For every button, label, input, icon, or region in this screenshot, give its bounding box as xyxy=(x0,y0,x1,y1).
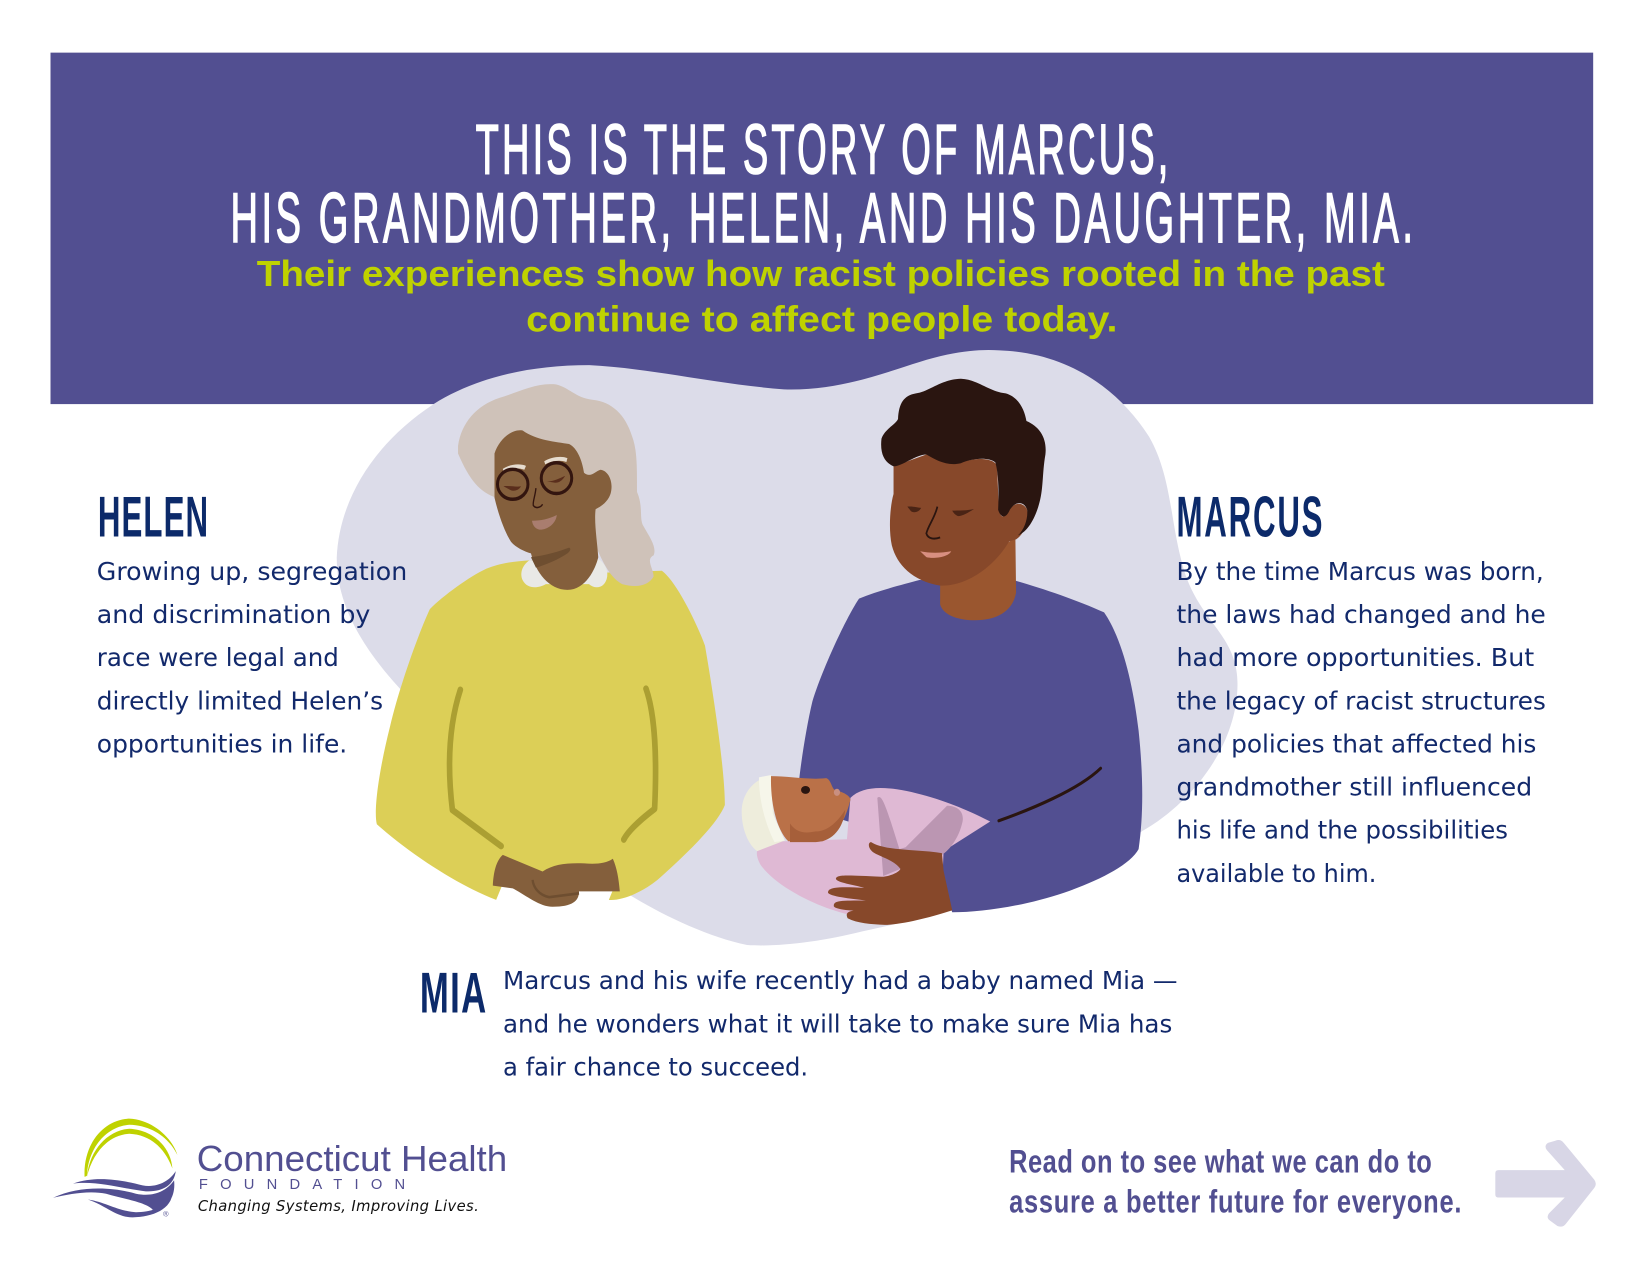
Helen text xyxy=(97,557,407,758)
Marcus hand xyxy=(828,842,952,925)
Helen sleeve folds xyxy=(449,689,656,846)
title: THIS IS THE STORY OF MARCUS, xyxy=(476,111,1168,190)
Helen neck shadow xyxy=(531,548,570,568)
Mia text xyxy=(503,966,1178,1081)
Marcus text: the laws had changed and he xyxy=(1176,600,1546,629)
subtitle: Their experiences show how racist policies rooted in the past xyxy=(257,254,1385,294)
call to action: Read on to see what we can do to xyxy=(1009,1144,1432,1180)
call to action xyxy=(1009,1144,1461,1220)
Mia text: a fair chance to succeed. xyxy=(503,1052,808,1081)
Helen eyes xyxy=(503,476,565,491)
Marcus text: available to him. xyxy=(1176,859,1376,888)
Helen glasses xyxy=(497,463,572,499)
subtitle xyxy=(257,254,1385,339)
Helen text: opportunities in life. xyxy=(97,729,347,758)
Helen collar xyxy=(521,559,607,587)
baby cheek shadow xyxy=(790,810,845,842)
baby cap band xyxy=(759,775,785,842)
title: HIS GRANDMOTHER, HELEN, AND HIS DAUGHTER, MIA. xyxy=(230,180,1413,258)
arrow xyxy=(1495,1140,1596,1227)
Marcus text: his life and the possibilities xyxy=(1176,816,1508,845)
Marcus face xyxy=(890,455,1028,586)
Marcus nose xyxy=(926,507,940,539)
Marcus neck xyxy=(940,537,1016,620)
Mia heading: MIA xyxy=(420,961,486,1026)
background blob xyxy=(337,350,1238,945)
Marcus text: By the time Marcus was born, xyxy=(1176,557,1544,586)
Mia text: Marcus and his wife recently had a baby named Mia — xyxy=(503,966,1178,995)
logo name: Connecticut Health xyxy=(197,1139,507,1179)
Marcus sweater xyxy=(799,580,1142,912)
call to action: assure a better future for everyone. xyxy=(1009,1184,1461,1220)
Helen text: race were legal and xyxy=(97,643,339,672)
Marcus sleeve line xyxy=(999,768,1101,821)
logo registered mark: ® xyxy=(163,1209,169,1218)
Helen finger line xyxy=(533,880,579,897)
Helen heading: HELEN xyxy=(98,484,208,549)
Marcus text: grandmother still influenced xyxy=(1176,773,1532,802)
Helen hands xyxy=(493,855,620,907)
Mia text: and he wonders what it will take to make sure Mia has xyxy=(503,1009,1172,1038)
Helen text: and discrimination by xyxy=(97,600,370,629)
Marcus hair xyxy=(881,379,1046,535)
Marcus text: the legacy of racist structures xyxy=(1176,686,1546,715)
Connecticut Health Foundation logo xyxy=(53,1119,507,1218)
logo tagline: Changing Systems, Improving Lives. xyxy=(198,1198,479,1215)
Helen mouth xyxy=(532,515,557,530)
baby face xyxy=(771,776,850,841)
logo foundation word: FOUNDATION xyxy=(199,1177,405,1193)
Helen eyebrows xyxy=(503,457,567,471)
logo mark xyxy=(53,1119,177,1217)
Marcus mouth xyxy=(920,551,951,558)
title xyxy=(230,111,1413,258)
Marcus heading: MARCUS xyxy=(1176,484,1323,549)
baby blanket xyxy=(757,788,990,916)
baby cap xyxy=(742,776,785,851)
baby eye xyxy=(801,786,810,794)
baby mouth xyxy=(834,789,840,796)
illustration: Helen xyxy=(376,384,725,907)
Marcus eyes xyxy=(907,506,974,516)
Helen text: Growing up, segregation xyxy=(97,557,407,586)
blanket folds xyxy=(877,797,963,876)
Helen hair xyxy=(458,384,654,586)
Marcus text: had more opportunities. But xyxy=(1176,643,1534,672)
Helen text: directly limited Helen’s xyxy=(97,686,383,715)
Helen sweater xyxy=(376,560,725,900)
Marcus text xyxy=(1176,557,1546,888)
subtitle: continue to affect people today. xyxy=(526,299,1118,339)
Helen nose xyxy=(533,488,543,508)
header banner xyxy=(51,53,1593,404)
Marcus text: and policies that affected his xyxy=(1176,729,1536,758)
illustration: Marcus and baby Mia xyxy=(742,379,1142,925)
Helen face and neck xyxy=(495,430,612,590)
